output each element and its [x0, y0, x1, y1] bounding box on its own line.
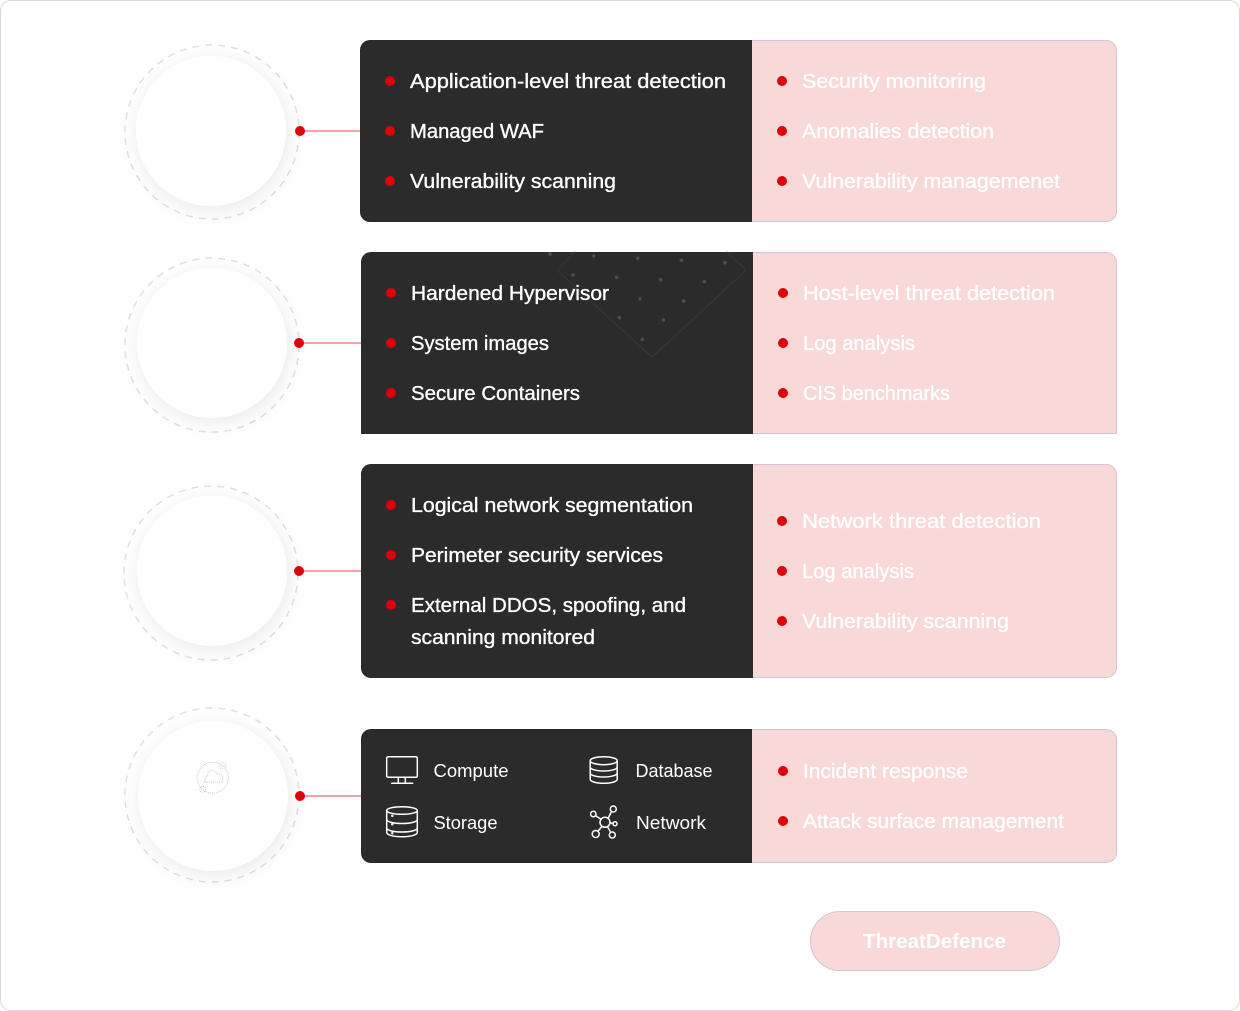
panel: network monitoring: Vulnerability scanning	[802, 611, 1009, 633]
circle badge 3	[124, 486, 298, 660]
panel: network monitoring: Network threat detection	[802, 511, 1041, 533]
panel: network monitoring: Log analysis	[802, 561, 914, 583]
icon: compute	[387, 757, 417, 783]
layer 3: network	[124, 464, 1116, 678]
panel: resources	[361, 729, 752, 863]
connector 2	[294, 338, 362, 348]
label: storage: Storage	[434, 813, 498, 833]
circle badge 1	[125, 45, 299, 219]
legend pill: ThreatDefence	[810, 912, 1060, 970]
panel: host monitoring: Log analysis	[803, 333, 915, 355]
panel: network controls	[361, 464, 753, 678]
circle badge 4	[125, 708, 299, 882]
circle badge 2	[125, 258, 299, 432]
panel: host monitoring: CIS benchmarks	[803, 383, 950, 405]
layer 2: host	[125, 252, 1116, 434]
layer 1: application	[125, 40, 1116, 222]
label: database: Database	[636, 761, 712, 781]
panel: application controls: Application-level threat detection	[410, 71, 726, 93]
panel: application controls	[360, 40, 752, 222]
panel: network controls: External DDOS, spoofing, and	[411, 595, 686, 617]
panel: host controls: System images	[411, 333, 549, 355]
panel: network controls: Logical network segmentation	[411, 495, 693, 517]
label: compute: Compute	[434, 761, 508, 781]
panel: resources monitoring: Attack surface management	[803, 811, 1064, 833]
connector 3	[294, 566, 362, 576]
legend pill: ThreatDefence: ThreatDefence	[863, 931, 1006, 953]
panel: host controls	[361, 252, 753, 434]
panel: resources monitoring	[752, 730, 1116, 862]
panel: application monitoring: Security monitoring	[802, 71, 986, 93]
icon: network	[591, 806, 617, 838]
panel: application monitoring: Anomalies detection	[802, 121, 994, 143]
panel: application controls: Vulnerability scanning	[410, 171, 616, 193]
icon: cloud	[197, 762, 228, 793]
panel: network controls: Perimeter security services	[411, 545, 663, 567]
connector 4	[295, 791, 362, 801]
label: network: Network	[636, 813, 707, 833]
panel: resources monitoring: Incident response	[803, 761, 968, 783]
panel: application controls: Managed WAF	[410, 121, 544, 143]
layer 4: cloud resources	[125, 708, 1116, 882]
panel: host monitoring	[753, 252, 1116, 434]
decorative diamond with dots	[548, 252, 745, 356]
panel: host monitoring: Host-level threat detection	[803, 283, 1055, 305]
panel: network controls: scanning monitored	[411, 627, 595, 649]
panel: host controls: Secure Containers	[411, 383, 580, 405]
icon: database	[590, 757, 617, 783]
panel: application monitoring	[752, 40, 1116, 222]
connector 1	[295, 126, 361, 136]
panel: host controls: Hardened Hypervisor	[411, 283, 609, 305]
icon: storage	[387, 807, 417, 837]
panel: application monitoring: Vulnerability managemenet	[802, 171, 1060, 193]
panel: network monitoring	[753, 464, 1116, 678]
